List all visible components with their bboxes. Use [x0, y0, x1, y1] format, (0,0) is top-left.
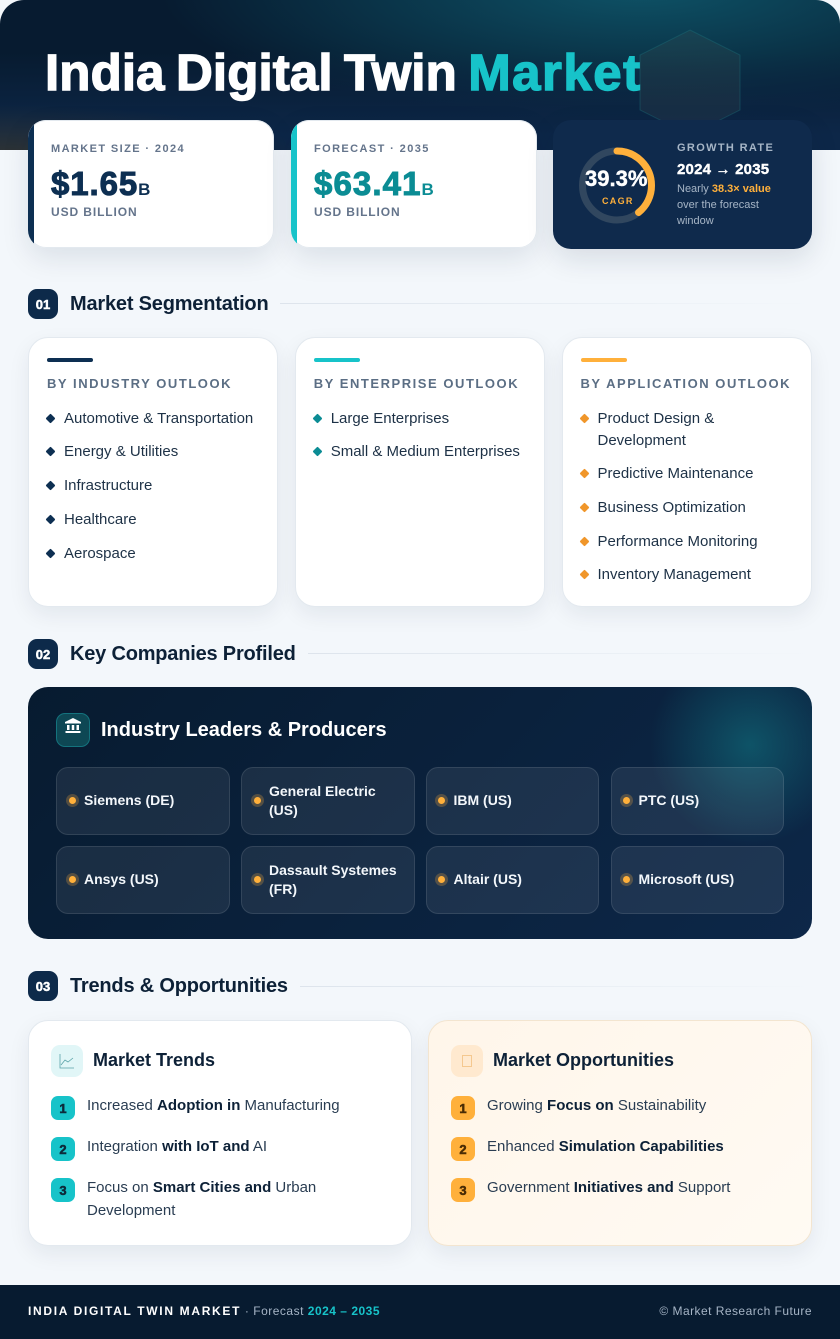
panel: market trends: 2 — [59, 1142, 67, 1156]
stat card: growth rate: GROWTH RATE — [677, 142, 774, 154]
panel: industry outlook — [28, 337, 278, 607]
panel: companies: (FR) — [269, 880, 297, 896]
panel: industry outlook: Aerospace — [64, 545, 136, 562]
section heading 02 — [28, 639, 626, 669]
footer: INDIA DIGITAL TWIN MARKET · Forecast 2024 – 2035 — [28, 1304, 380, 1318]
panel: companies — [28, 687, 812, 939]
stat card: growth rate: 39.3% — [585, 166, 647, 191]
stat card: growth rate — [553, 120, 812, 249]
section heading 01 — [28, 289, 616, 319]
section heading 03: Trends & Opportunities — [70, 975, 288, 997]
stat card: market size: MARKET SIZE · 2024 — [51, 143, 185, 155]
footer: © Market Research Future — [659, 1304, 812, 1318]
panel: application outlook: BY APPLICATION OUTLOOK — [580, 376, 791, 391]
panel: application outlook: Business Optimization — [598, 499, 746, 516]
panel: companies: PTC (US) — [638, 792, 699, 808]
panel: market trends — [28, 1020, 412, 1246]
panel: market opportunities: 1 — [459, 1100, 467, 1116]
panel: companies: (US) — [269, 802, 298, 818]
panel heading: Industry Leaders & Producers — [101, 719, 387, 741]
panel: market opportunities — [428, 1020, 812, 1246]
panel: market opportunities: 3 — [459, 1182, 467, 1198]
panel: application outlook — [562, 337, 812, 607]
panel: industry outlook: Healthcare — [64, 511, 137, 528]
panel: industry outlook: Automotive & Transportation — [64, 410, 253, 427]
panel: industry outlook: BY INDUSTRY OUTLOOK — [47, 376, 232, 391]
panel: market trends: Development — [87, 1202, 175, 1218]
panel: market trends: Increased Adoption in Manufacturing — [87, 1097, 340, 1114]
stat card: market size: $1.65B — [51, 165, 150, 202]
footer — [0, 1285, 840, 1339]
panel: market opportunities: Enhanced Simulation Capabilities — [487, 1138, 724, 1155]
section heading 02: 02 — [36, 646, 50, 662]
section heading 03: 03 — [36, 978, 50, 994]
decorative hexagon — [640, 30, 740, 120]
section heading 03 — [28, 971, 622, 1001]
section heading 02: Key Companies Profiled — [70, 643, 296, 665]
panel: companies: Altair (US) — [454, 871, 522, 887]
panel: market opportunities: Market Opportunities — [493, 1050, 674, 1070]
panel: companies: Siemens (DE) — [84, 792, 174, 808]
panel: companies: Dassault Systemes — [269, 862, 397, 878]
stat card: forecast: $63.41B — [314, 165, 434, 202]
stat card: growth rate: 2024 → 2035 — [677, 161, 769, 178]
panel: market trends: Market Trends — [93, 1050, 215, 1070]
panel: application outlook: Performance Monitoring — [598, 533, 758, 550]
header band — [0, 0, 840, 150]
panel: market trends: 1 — [59, 1100, 67, 1116]
panel: market trends: Integration with IoT and AI — [87, 1138, 267, 1155]
stat card: forecast — [291, 120, 537, 248]
panel: companies: Microsoft (US) — [638, 871, 734, 887]
section heading 01: Market Segmentation — [70, 293, 268, 315]
title: India Digital Twin Market — [45, 44, 642, 101]
panel: industry outlook: Energy & Utilities — [64, 443, 178, 460]
section heading 01: 01 — [36, 296, 50, 312]
panel: application outlook: Inventory Management — [598, 566, 751, 583]
stat card: growth rate: CAGR — [602, 196, 634, 206]
panel: enterprise outlook: BY ENTERPRISE OUTLOOK — [314, 376, 519, 391]
panel: market opportunities: Government Initiatives and Support — [487, 1179, 730, 1196]
stat card: growth rate: Nearly 38.3× value over the forecast window — [677, 183, 771, 227]
panel: application outlook: Development — [598, 432, 686, 448]
stat card: market size: USD BILLION — [51, 205, 138, 219]
panel: companies: General Electric — [269, 783, 376, 799]
panel: market trends: 3 — [59, 1182, 67, 1198]
panel: market opportunities: Growing Focus on Sustainability — [487, 1097, 706, 1114]
panel: enterprise outlook: Large Enterprises — [331, 410, 449, 427]
stat card: forecast: FORECAST · 2035 — [314, 143, 430, 155]
panel: companies: Ansys (US) — [84, 871, 159, 887]
icon: bank — [56, 713, 90, 747]
stat card: forecast: USD BILLION — [314, 205, 401, 219]
panel: application outlook: Product Design & — [598, 410, 714, 427]
panel: companies: IBM (US) — [454, 792, 512, 808]
panel: market trends: Focus on Smart Cities and Urban — [87, 1179, 316, 1196]
panel: enterprise outlook: Small & Medium Enterprises — [331, 443, 520, 460]
icon: chart — [51, 1045, 83, 1077]
panel: application outlook: Predictive Maintenance — [598, 465, 753, 482]
stat card: market size — [28, 120, 274, 248]
donut gauge — [579, 148, 655, 224]
panel: industry outlook: Infrastructure — [64, 477, 152, 494]
panel: market opportunities: 2 — [459, 1142, 467, 1156]
panel: enterprise outlook — [295, 337, 545, 607]
icon: placeholder glyph — [451, 1045, 483, 1077]
